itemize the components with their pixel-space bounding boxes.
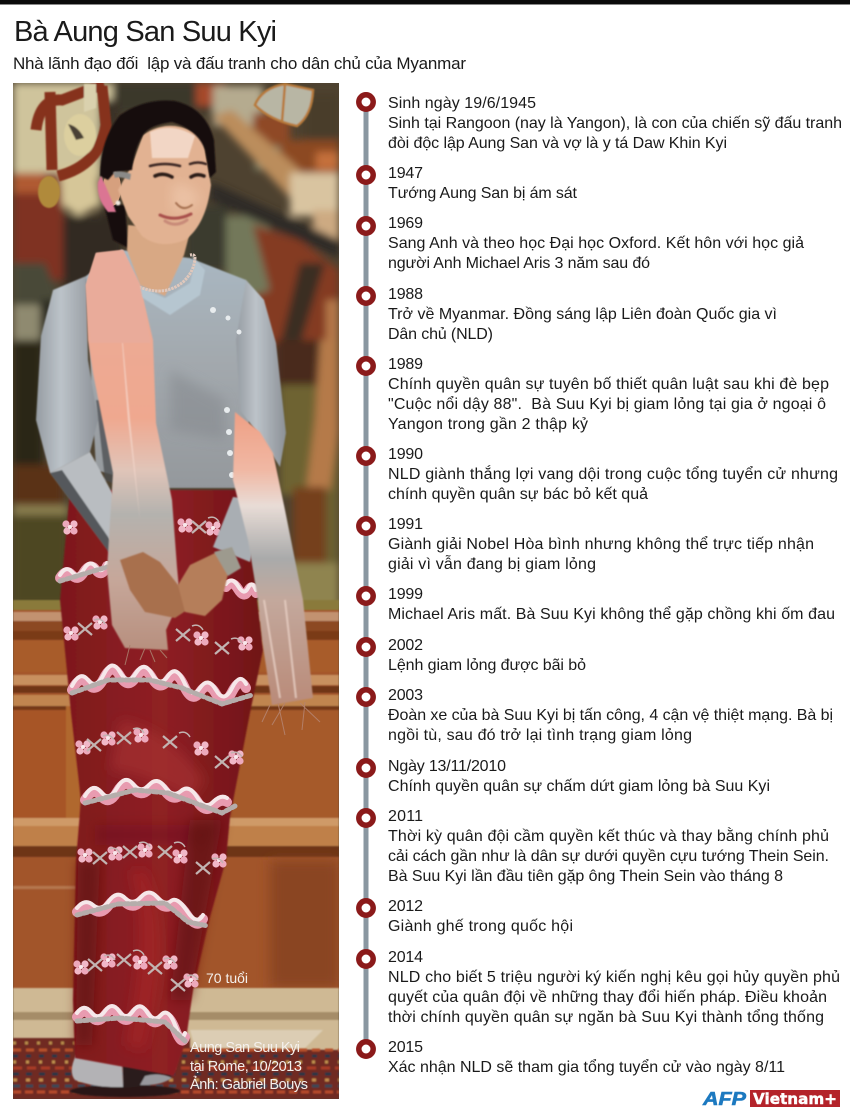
timeline entry: 1945: Sinh ngày 19/6/1945 [388, 95, 536, 112]
left scarf fringe [125, 645, 167, 665]
skirt highlights [76, 720, 222, 1050]
timeline entry: 1990 [388, 446, 838, 503]
timeline entry: 1988: 1988 [388, 286, 423, 303]
hands [120, 547, 241, 618]
timeline entry: 1999: 1999 [388, 586, 423, 603]
timeline entry: 2014: quyết của quân đội về những thay đổi hiến pháp. Điều khoản [388, 988, 827, 1006]
timeline entry: 1947: Tướng Aung San bị ám sát [388, 185, 578, 202]
timeline entry: 1989: "Cuộc nổi dậy 88". Bà Suu Kyi bị giam lỏng tại gia ở ngoại ô [388, 395, 826, 413]
painting background [13, 83, 339, 608]
right scarf [233, 412, 313, 705]
timeline entry: 1991: Giành giải Nobel Hòa bình nhưng không thể trực tiếp nhận [388, 535, 814, 553]
timeline entry: 2014 [388, 949, 840, 1026]
skirt [60, 490, 263, 1076]
timeline entry: 2002: Lệnh giam lỏng được bãi bỏ [388, 657, 586, 674]
blouse shading [170, 375, 224, 436]
timeline entry: 1990: NLD giành thắng lợi vang dội trong cuộc tổng tuyển cử nhưng [388, 464, 838, 483]
timeline entry: 2010: Ngày 13/11/2010 [388, 758, 506, 775]
timeline entry: 2002: 2002 [388, 637, 423, 654]
facial features [150, 162, 206, 224]
timeline entry: 2002 [388, 637, 586, 674]
hair [100, 101, 216, 180]
ear [103, 170, 121, 206]
timeline markers [359, 95, 373, 1056]
wainscot [13, 600, 339, 990]
back hair [104, 205, 128, 248]
timeline entry: 1947: 1947 [388, 165, 423, 182]
timeline entry: 2014: 2014 [388, 949, 423, 966]
scarf over shoulder [85, 249, 143, 342]
timeline entry: 1969: người Anh Michael Aris 3 năm sau đó [388, 255, 650, 272]
face [118, 126, 211, 244]
neck [127, 225, 190, 296]
timeline entry: 1989: Chính quyền quân sự tuyên bố thiết quân luật sau khi đè bẹp [388, 376, 829, 393]
timeline entry: 1988 [388, 286, 777, 343]
timeline entry: 1990: chính quyền quân sự bác bỏ kết quả [388, 486, 648, 503]
carpet [13, 1038, 339, 1099]
timeline entry: 2010 [388, 758, 770, 795]
blouse and sleeves [36, 250, 286, 567]
timeline entry: 2003: ngồi tù, sau đó trở lại tình trạng giam lỏng [388, 727, 692, 744]
necklace [139, 255, 195, 291]
timeline entry: 1999 [388, 586, 835, 623]
timeline entry: 2011: Thời kỳ quân đội cầm quyền kết thúc và thay bằng chính phủ [388, 826, 829, 845]
collar [121, 248, 205, 315]
timeline entry: 1991: giải vì vẫn đang bị giam lỏng [388, 554, 596, 573]
timeline entry: 2011: cải cách gần như là dân sự dưới quyền cựu tướng Thein Sein. [388, 848, 829, 865]
timeline entry: 1988: Dân chủ (NLD) [388, 326, 493, 343]
left scarf [86, 250, 180, 650]
timeline entry: 2014: NLD cho biết 5 triệu người ký kiến nghị kêu gọi hủy quyền phủ [388, 969, 840, 986]
timeline entry: 1969 [388, 215, 804, 272]
timeline entry: 2012: Giành ghế trong quốc hội [388, 918, 573, 935]
soldier helmet in painting [255, 84, 313, 126]
timeline entry: 2015 [388, 1039, 785, 1076]
floor [13, 988, 339, 1052]
hair flower and earring [98, 176, 120, 212]
timeline entry: 1999: Michael Aris mất. Bà Suu Kyi không thể gặp chồng khi ốm đau [388, 605, 835, 623]
timeline entry: 2012: 2012 [388, 898, 423, 915]
timeline axis [364, 102, 368, 1049]
timeline entry: 2011: Bà Suu Kyi lần đầu tiên gặp ông Thein Sein vào tháng 8 [388, 868, 783, 885]
caption: photo credit: Aung San Suu Kyi [190, 1040, 300, 1056]
timeline entry: 1989: 1989 [388, 356, 423, 373]
timeline entry: 1945: đòi độc lập Aung San và vợ là y tá Daw Khin Kyi [388, 135, 727, 152]
caption: photo credit: Ảnh: Gabriel Bouys [190, 1076, 308, 1093]
timeline entry: 1947 [388, 165, 578, 202]
timeline entry: 1969: Sang Anh và theo học Đại học Oxford. Kết hôn với học giả [388, 235, 804, 252]
timeline entry: 2014: thời chính quyền quân sự ngăn bà Suu Kyi thành tổng thống [388, 1008, 824, 1026]
timeline entry: 1989 [388, 356, 829, 433]
right scarf fringe [262, 702, 320, 735]
timeline entry: 1990: 1990 [388, 446, 423, 463]
blouse right forearm [213, 497, 258, 562]
timeline entry: 1945 [388, 95, 842, 152]
logo: Vietnam+: Vietnam+ [753, 1090, 837, 1108]
darker wood at right [270, 860, 339, 988]
timeline entry: 1989: Yangon trong gần 2 thập kỷ [388, 416, 588, 433]
timeline entry: 1988: Trở về Myanmar. Đồng sáng lập Liên đoàn Quốc gia vì [388, 306, 777, 323]
timeline entry: 1945: Sinh tại Rangoon (nay là Yangon), là con của chiến sỹ đấu tranh [388, 115, 842, 132]
shoes [70, 1055, 180, 1097]
timeline entry: 1969: 1969 [388, 215, 423, 232]
subtitle: Nhà lãnh đạo đối lập và đấu tranh cho dân chủ của Myanmar [13, 54, 466, 73]
timeline entry: 2003 [388, 687, 833, 744]
timeline entry: 2010: Chính quyền quân sự chấm dứt giam lỏng bà Suu Kyi [388, 778, 770, 795]
skirt wave bands [60, 563, 256, 1042]
timeline entry: 2012 [388, 898, 573, 935]
photo: Aung San Suu Kyi standing in front of a painting [13, 83, 339, 1099]
title: Bà Aung San Suu Kyi [14, 16, 277, 48]
logo: AFP: AFP [702, 1089, 747, 1109]
skirt flower bands [62, 517, 253, 991]
horse head in painting [36, 84, 106, 208]
timeline entry: 1991 [388, 516, 814, 573]
timeline entry: 2015: 2015 [388, 1039, 423, 1056]
caption: age: 70 tuổi [206, 970, 248, 986]
top black bar [0, 0, 850, 5]
timeline entry: 2015: Xác nhận NLD sẽ tham gia tổng tuyển cử vào ngày 8/11 [388, 1058, 785, 1076]
blouse buttons [210, 307, 242, 478]
caption: photo credit [190, 1040, 308, 1093]
timeline entry: 2003: Đoàn xe của bà Suu Kyi bị tấn công, 4 cận vệ thiệt mạng. Bà bị [388, 707, 833, 724]
timeline entry: 2011: 2011 [388, 808, 423, 825]
timeline entry: 2011 [388, 808, 829, 885]
caption: photo credit: tại Rome, 10/2013 [190, 1059, 302, 1075]
timeline entry: 1991: 1991 [388, 516, 423, 533]
timeline entry: 2003: 2003 [388, 687, 423, 704]
